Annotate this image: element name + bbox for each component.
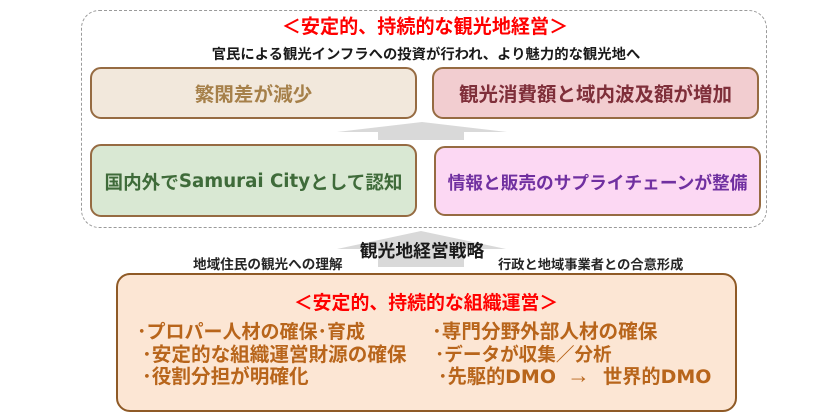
list: left column (137, 322, 407, 388)
list: left column: ･プロパー人材の確保･育成 (137, 322, 365, 343)
list: left column: ･安定的な組織運営財源の確保 (142, 344, 407, 366)
subheading: public and private investment: 官民による観光インフラへの投資が行われ、より魅力的な観光地へ (212, 47, 640, 63)
box: supply chain (434, 146, 761, 216)
label: residents' understanding: 地域住民の観光への理解 (193, 257, 343, 272)
box: Samurai City recognition (90, 144, 417, 217)
arrow: upper (338, 122, 506, 140)
box: supply chain: 情報と販売のサプライチェーンが整備 (448, 172, 747, 192)
list: left column: ･役割分担が明確化 (142, 366, 309, 388)
list: right column (432, 321, 711, 388)
list: right column: → (567, 362, 590, 388)
box: reduced seasonal gap (90, 67, 417, 119)
list: right column: ･専門分野外部人材の確保 (432, 321, 657, 343)
label: consensus building: 行政と地域事業者との合意形成 (498, 257, 683, 272)
box: Samurai City recognition: Samurai City (179, 171, 310, 192)
list: right column: 世界的DMO (603, 366, 711, 388)
arrow: lower (338, 231, 506, 267)
box: tourism spending increase (432, 67, 759, 119)
panel: organisation management (116, 273, 737, 412)
list: right column: ･先駆的DMO (438, 366, 556, 388)
box: Samurai City recognition: 国内外で として認知 (104, 172, 403, 193)
outer dashed panel: destination management (81, 10, 767, 228)
box: tourism spending increase: 観光消費額と域内波及額が増加 (459, 84, 732, 106)
heading: stable, sustainable destination management: ＜安定的、持続的な観光地経営＞ (282, 17, 568, 38)
heading: stable, sustainable organisation management: ＜安定的、持続的な組織運営＞ (294, 293, 558, 314)
list: right column: ･データが収集／分析 (435, 344, 612, 365)
box: reduced seasonal gap: 繁閑差が減少 (195, 84, 312, 106)
label: destination management strategy: 観光地経営戦略 (360, 241, 484, 261)
